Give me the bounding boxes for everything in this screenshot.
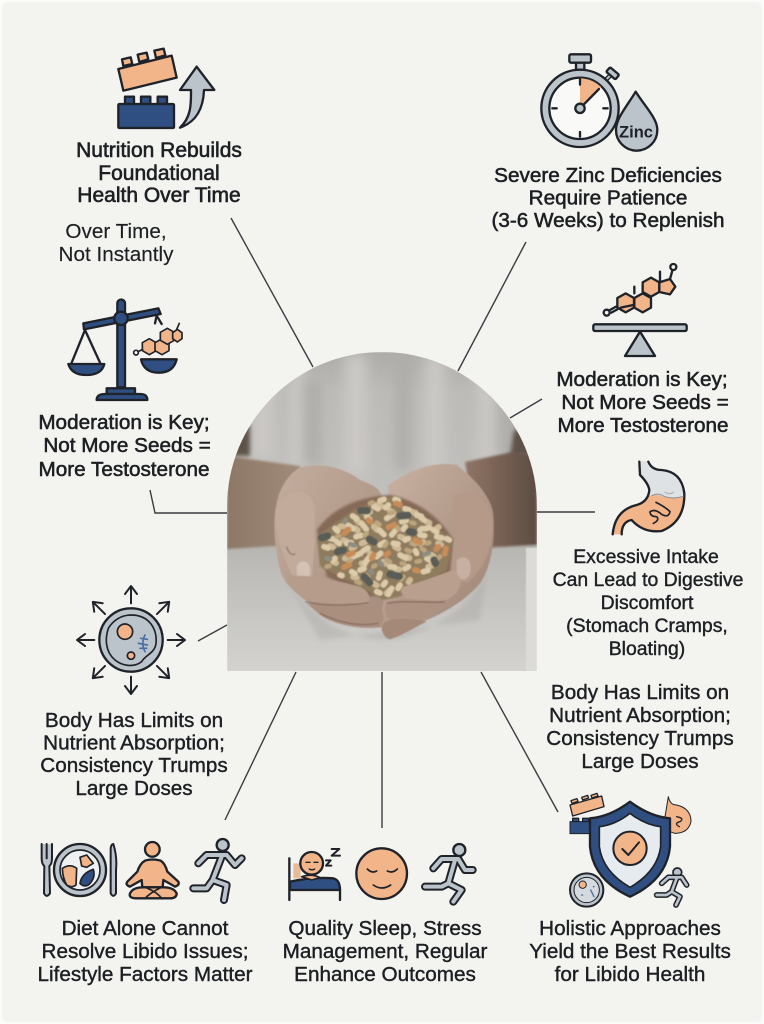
icon: cell with radiating arrows	[77, 586, 185, 694]
text: diet alone: Diet Alone Cannot	[62, 917, 229, 940]
text: excessive intake: (Stomach Cramps,	[566, 615, 728, 637]
runner	[217, 839, 229, 851]
soft shadow under hands	[302, 586, 483, 640]
text: over time, not instantly	[59, 220, 174, 266]
text: severe zinc deficiencies	[491, 164, 725, 232]
text: body limits left: Body Has Limits on	[45, 709, 223, 732]
text: body limits right	[546, 681, 734, 773]
text: nutrition rebuilds: Health Over Time	[77, 184, 241, 207]
text: nutrition rebuilds	[76, 139, 242, 207]
fork	[42, 844, 52, 896]
text: body limits right: Nutrient Absorption;	[549, 704, 731, 727]
icon: sleep, calm face, runner	[289, 844, 473, 902]
left hand	[274, 465, 387, 628]
text: diet alone: Resolve Libido Issues;	[42, 940, 248, 963]
icon: balance scale with hormone molecule	[68, 300, 182, 400]
knife	[111, 844, 116, 896]
text: severe zinc deficiencies: Require Patience	[529, 186, 687, 210]
runner	[453, 844, 465, 856]
text: severe zinc deficiencies: Severe Zinc Deficiencies	[494, 164, 722, 187]
text: excessive intake: Excessive Intake	[573, 546, 719, 568]
icon: plate, meditation, runner	[42, 839, 242, 900]
text: moderation right: More Testosterone	[558, 414, 728, 437]
text: moderation left: Not More Seeds =	[43, 434, 211, 457]
text: body limits left: Nutrient Absorption;	[43, 732, 225, 754]
icon: stopwatch and zinc drop	[541, 54, 657, 151]
text: excessive intake	[553, 546, 743, 660]
icon: building blocks with arrow	[118, 49, 214, 128]
text: body limits left: Large Doses	[75, 777, 193, 800]
text: body limits right: Body Has Limits on	[551, 681, 729, 704]
right hand	[381, 464, 494, 637]
text: holistic approaches: Holistic Approaches	[539, 917, 721, 940]
text: diet alone: Lifestyle Factors Matter	[38, 963, 253, 986]
text: moderation right	[556, 368, 729, 437]
text: quality sleep: Management, Regular	[283, 940, 487, 963]
text: body limits right: Large Doses	[581, 750, 699, 773]
icon: molecule on balance	[593, 264, 687, 356]
central photo: cupped hands holding seeds	[227, 352, 537, 672]
text: holistic approaches	[529, 917, 731, 986]
icon label: zinc: Zinc	[619, 124, 653, 142]
icon: stomach	[613, 462, 684, 534]
text: quality sleep: Enhance Outcomes	[294, 963, 476, 986]
text: moderation left	[38, 411, 211, 481]
left thumb and fingers	[284, 510, 314, 576]
text: quality sleep	[283, 917, 487, 986]
text: moderation left: More Testosterone	[39, 458, 209, 481]
text: moderation left: Moderation is Key;	[38, 411, 210, 434]
text: body limits left: Consistency Trumps	[40, 754, 228, 777]
plate	[54, 844, 106, 896]
text: body limits right: Consistency Trumps	[546, 727, 734, 750]
text: excessive intake: Can Lead to Digestive	[553, 569, 743, 591]
text: severe zinc deficiencies: (3-6 Weeks) to Replenish	[491, 209, 725, 232]
text: diet alone	[38, 917, 253, 986]
text: quality sleep: Quality Sleep, Stress	[288, 917, 482, 940]
text: over time, not instantly: Not Instantly	[59, 243, 174, 266]
text: nutrition rebuilds: Foundational	[98, 162, 220, 185]
text: over time, not instantly: Over Time,	[65, 220, 167, 243]
text: body limits left	[40, 709, 228, 800]
icon: holistic shield	[570, 793, 691, 907]
text: moderation right: Not More Seeds =	[561, 391, 729, 414]
connector lines	[150, 218, 595, 828]
text: excessive intake: Discomfort	[601, 592, 694, 614]
calm face	[356, 848, 407, 899]
text: holistic approaches: Yield the Best Results	[529, 940, 731, 963]
right thumb and fingers	[452, 518, 492, 582]
text: moderation right: Moderation is Key;	[556, 368, 728, 391]
meditating person	[145, 842, 160, 857]
text: excessive intake: Bloating)	[609, 638, 685, 660]
text: holistic approaches: for Libido Health	[555, 963, 705, 986]
sleeper	[293, 863, 301, 878]
text: nutrition rebuilds: Nutrition Rebuilds	[76, 139, 242, 162]
seeds	[317, 497, 453, 600]
